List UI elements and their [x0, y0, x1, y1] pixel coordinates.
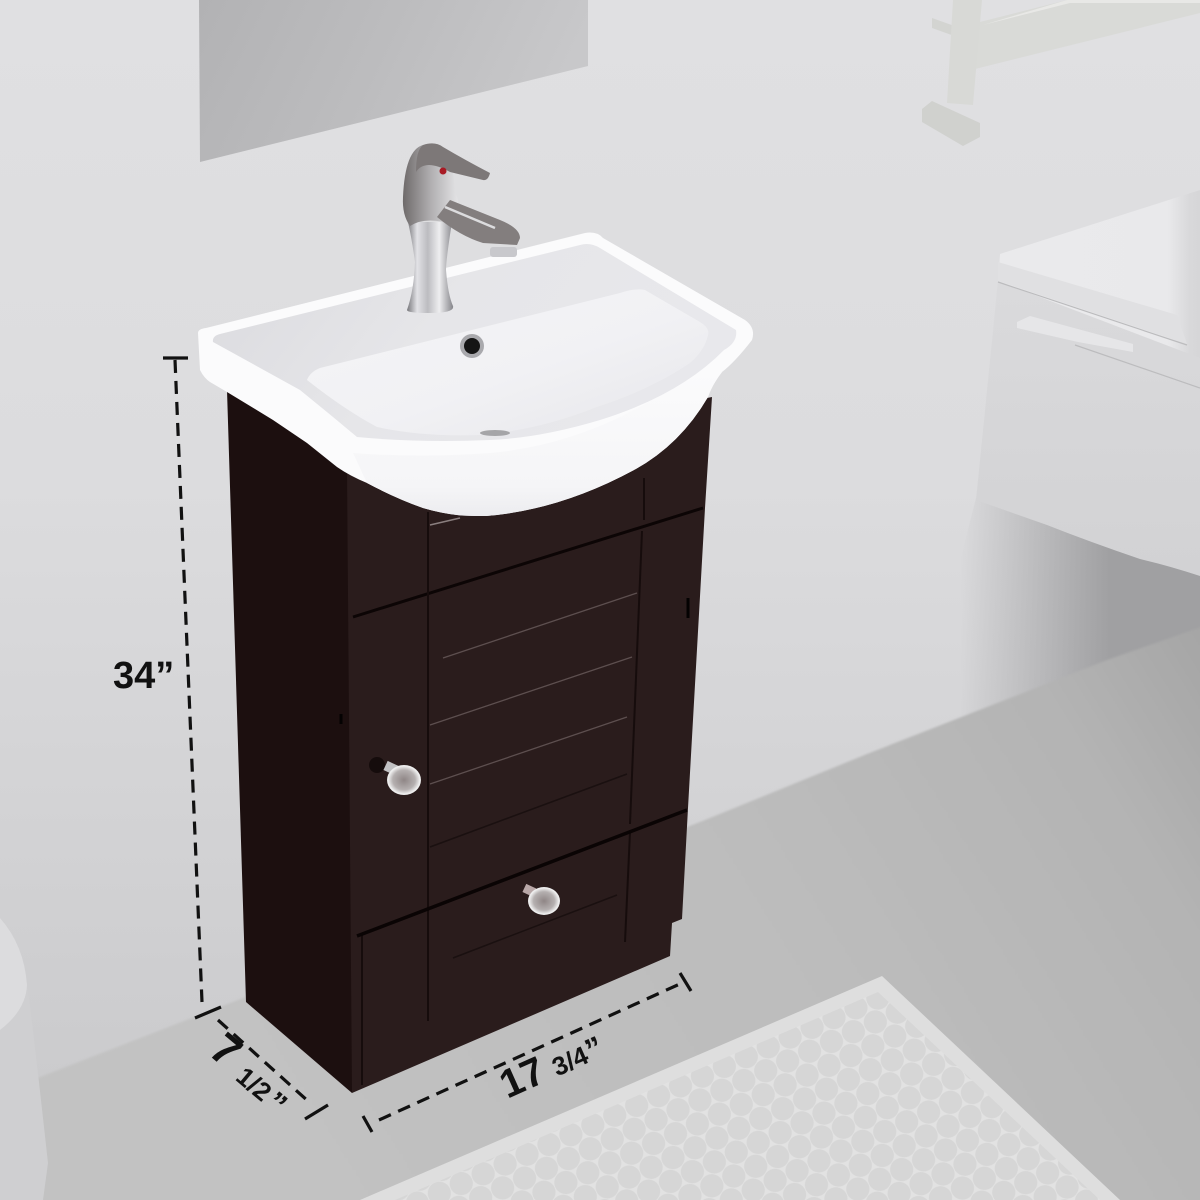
faucet spout	[437, 200, 520, 245]
label: depth 7 1/2 inches	[201, 1024, 294, 1122]
toilet body	[976, 281, 1200, 576]
hot indicator	[440, 168, 446, 174]
toilet lid	[998, 190, 1200, 358]
label: width 17 3/4 inches: ”	[579, 1029, 609, 1068]
bath rug	[360, 976, 1120, 1200]
sink outline	[198, 233, 753, 516]
faucet stem	[407, 222, 453, 313]
floor	[0, 610, 1200, 1200]
label: height 34 inches: 34”	[113, 655, 174, 697]
height dimension	[163, 358, 202, 1002]
label: width 17 3/4 inches: 17	[493, 1049, 552, 1107]
toilet at left	[0, 918, 48, 1200]
toilet at right	[976, 190, 1200, 576]
toilet handle	[1017, 316, 1133, 352]
sink apron below lip	[353, 372, 722, 516]
door panel details	[362, 478, 644, 1085]
chrome faucet	[403, 143, 520, 313]
cabinet side panel	[227, 390, 375, 1093]
label: width 17 3/4 inches: 3/4	[547, 1040, 593, 1082]
drain	[480, 430, 510, 436]
dimension lines	[163, 358, 691, 1132]
top rail gap	[353, 508, 703, 617]
label: depth 7 1/2 inches: 1/2	[231, 1061, 277, 1107]
cabinet	[227, 390, 712, 1093]
depth dimension	[195, 1007, 328, 1119]
wall mirror	[199, 0, 588, 162]
overflow ring	[460, 334, 484, 358]
cabinet front	[347, 397, 712, 1093]
label: width 17 3/4 inches	[493, 1029, 609, 1107]
faucet handle	[416, 143, 490, 180]
sink deck	[213, 244, 736, 441]
label: depth 7 1/2 inches: ”	[259, 1084, 294, 1122]
aerator	[490, 247, 517, 257]
basin bowl	[307, 289, 708, 435]
door latches	[341, 598, 688, 724]
drawer gap	[357, 810, 687, 936]
label: depth 7 1/2 inches: 7	[201, 1024, 251, 1077]
toilet shadow on wall	[950, 498, 1200, 720]
faucet body	[403, 145, 458, 226]
towel rack	[922, 0, 1200, 146]
width dimension	[363, 973, 691, 1132]
drawer knob	[522, 884, 560, 915]
door knob	[369, 757, 421, 795]
ceramic sink	[198, 233, 753, 516]
